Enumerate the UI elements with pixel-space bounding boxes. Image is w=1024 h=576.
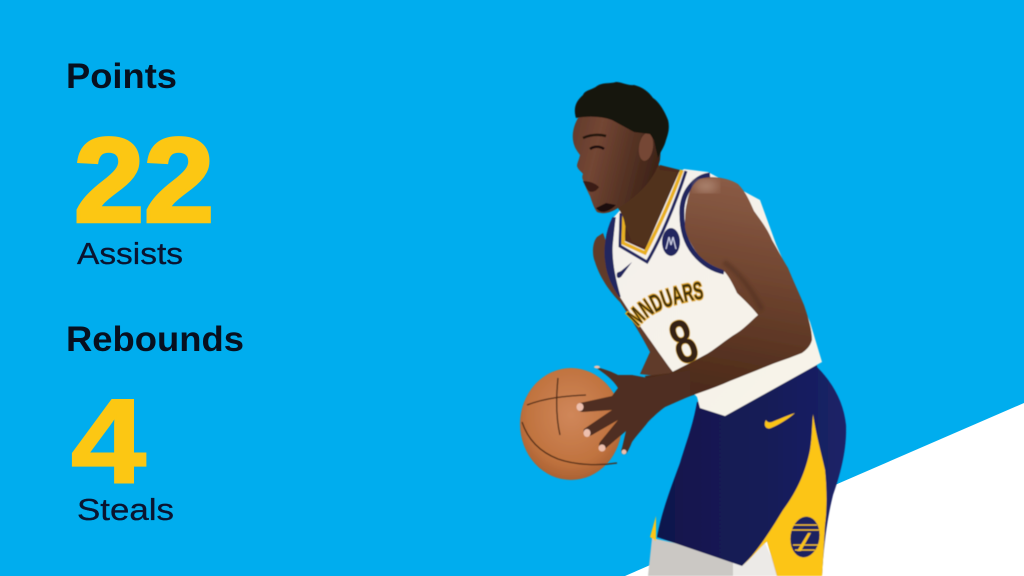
white diagonal corner [625, 403, 1024, 576]
shorts circular badge [788, 515, 822, 559]
jersey swoosh [617, 262, 632, 278]
label: Assists: Assists [77, 236, 183, 271]
heading: Rebounds: Rebounds [66, 320, 244, 359]
neck [618, 150, 677, 247]
neck gold trim [623, 170, 682, 253]
near arm [645, 177, 812, 402]
arm muscle shadow [724, 262, 762, 310]
hair [575, 82, 669, 158]
shorts [650, 360, 846, 576]
stats column [66, 57, 244, 527]
number: 22: 22 [74, 114, 214, 248]
collar inside skin [625, 165, 680, 250]
label: Steals: Steals [77, 492, 174, 527]
jersey lettering curve [638, 298, 708, 327]
eye [590, 147, 604, 149]
jersey number 8: 8 [661, 306, 706, 379]
left armhole trim [605, 218, 620, 297]
head [573, 82, 669, 213]
shorts swoosh [765, 413, 795, 428]
brow [583, 135, 606, 138]
far arm [593, 233, 680, 378]
fingernails [576, 366, 626, 454]
basketball [520, 368, 622, 480]
legs and compression tights [648, 538, 780, 576]
shorts side panel [742, 414, 826, 576]
jersey lettering: MNDUARS [624, 280, 704, 328]
mouth [583, 181, 599, 192]
shoulder highlight [694, 180, 718, 192]
neck navy trim [620, 171, 686, 262]
jersey [604, 164, 823, 417]
right armhole trim [682, 175, 724, 272]
player figure [519, 81, 847, 576]
ear [637, 132, 655, 162]
number: 4: 4 [71, 374, 146, 508]
hand on ball [576, 366, 690, 455]
motorola badge [662, 228, 680, 256]
heading: Points: Points [66, 57, 177, 96]
goatee [596, 203, 616, 212]
shorts left trim [650, 516, 656, 541]
